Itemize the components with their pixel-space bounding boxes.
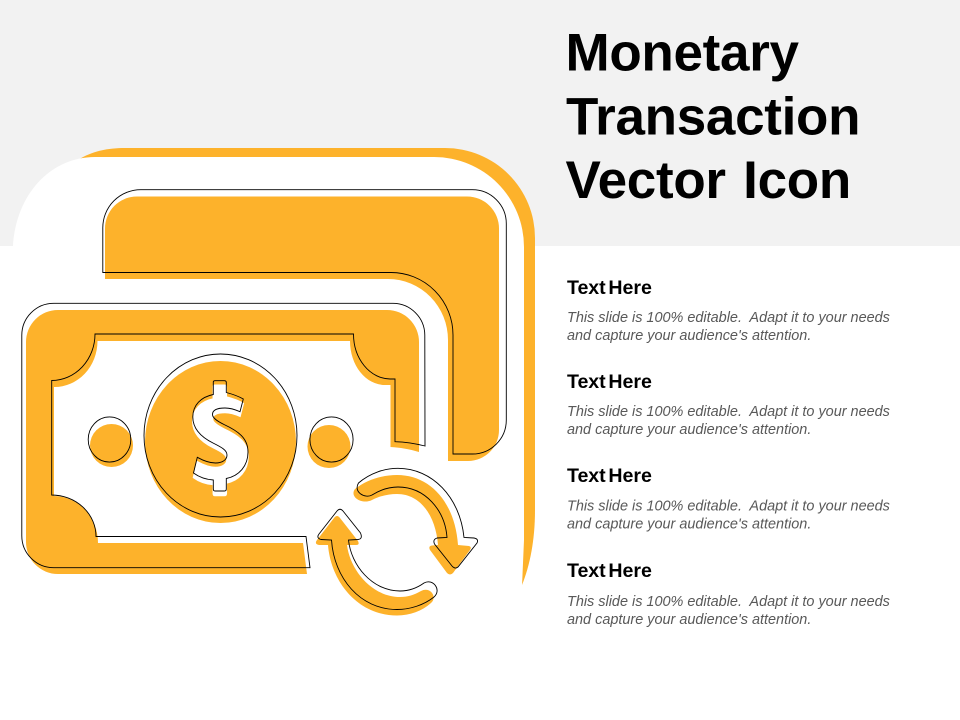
text block 2 xyxy=(567,371,890,438)
text block 2: Text Here xyxy=(567,371,652,393)
arrow: upper clockwise xyxy=(353,468,478,574)
dollar coin xyxy=(144,354,297,523)
arrow: lower clockwise xyxy=(316,509,437,616)
text block 1 xyxy=(567,277,890,344)
header background band xyxy=(0,0,960,246)
text block 3 xyxy=(567,465,890,532)
banknote frame xyxy=(22,303,425,574)
rounded backdrop panel xyxy=(13,148,535,640)
title xyxy=(566,24,860,210)
left serial dot xyxy=(88,417,133,467)
text block 1: This slide is 100% editable. Adapt it to your needs xyxy=(567,310,890,326)
text block 4 xyxy=(567,560,890,628)
text block 3: This slide is 100% editable. Adapt it to your needs xyxy=(567,498,890,514)
text block 1: and capture your audience's attention. xyxy=(567,328,811,344)
text block 2: and capture your audience's attention. xyxy=(567,422,811,438)
title: Monetary xyxy=(566,24,800,83)
text block 4: Text Here xyxy=(567,560,652,582)
text block 3: and capture your audience's attention. xyxy=(567,516,811,532)
text block 2: This slide is 100% editable. Adapt it to your needs xyxy=(567,404,890,420)
right serial dot xyxy=(308,417,353,468)
icon: back banknote xyxy=(103,190,506,461)
title: Vector Icon xyxy=(566,151,851,210)
text block 3: Text Here xyxy=(567,465,652,487)
text block 4: This slide is 100% editable. Adapt it to your needs xyxy=(567,594,890,610)
icon: front banknote xyxy=(22,303,425,574)
title: Transaction xyxy=(566,87,860,146)
text block 1: Text Here xyxy=(567,277,652,299)
text block 4: and capture your audience's attention. xyxy=(567,612,811,628)
icon: circular exchange arrows xyxy=(316,468,478,616)
dollar sign xyxy=(193,381,248,496)
